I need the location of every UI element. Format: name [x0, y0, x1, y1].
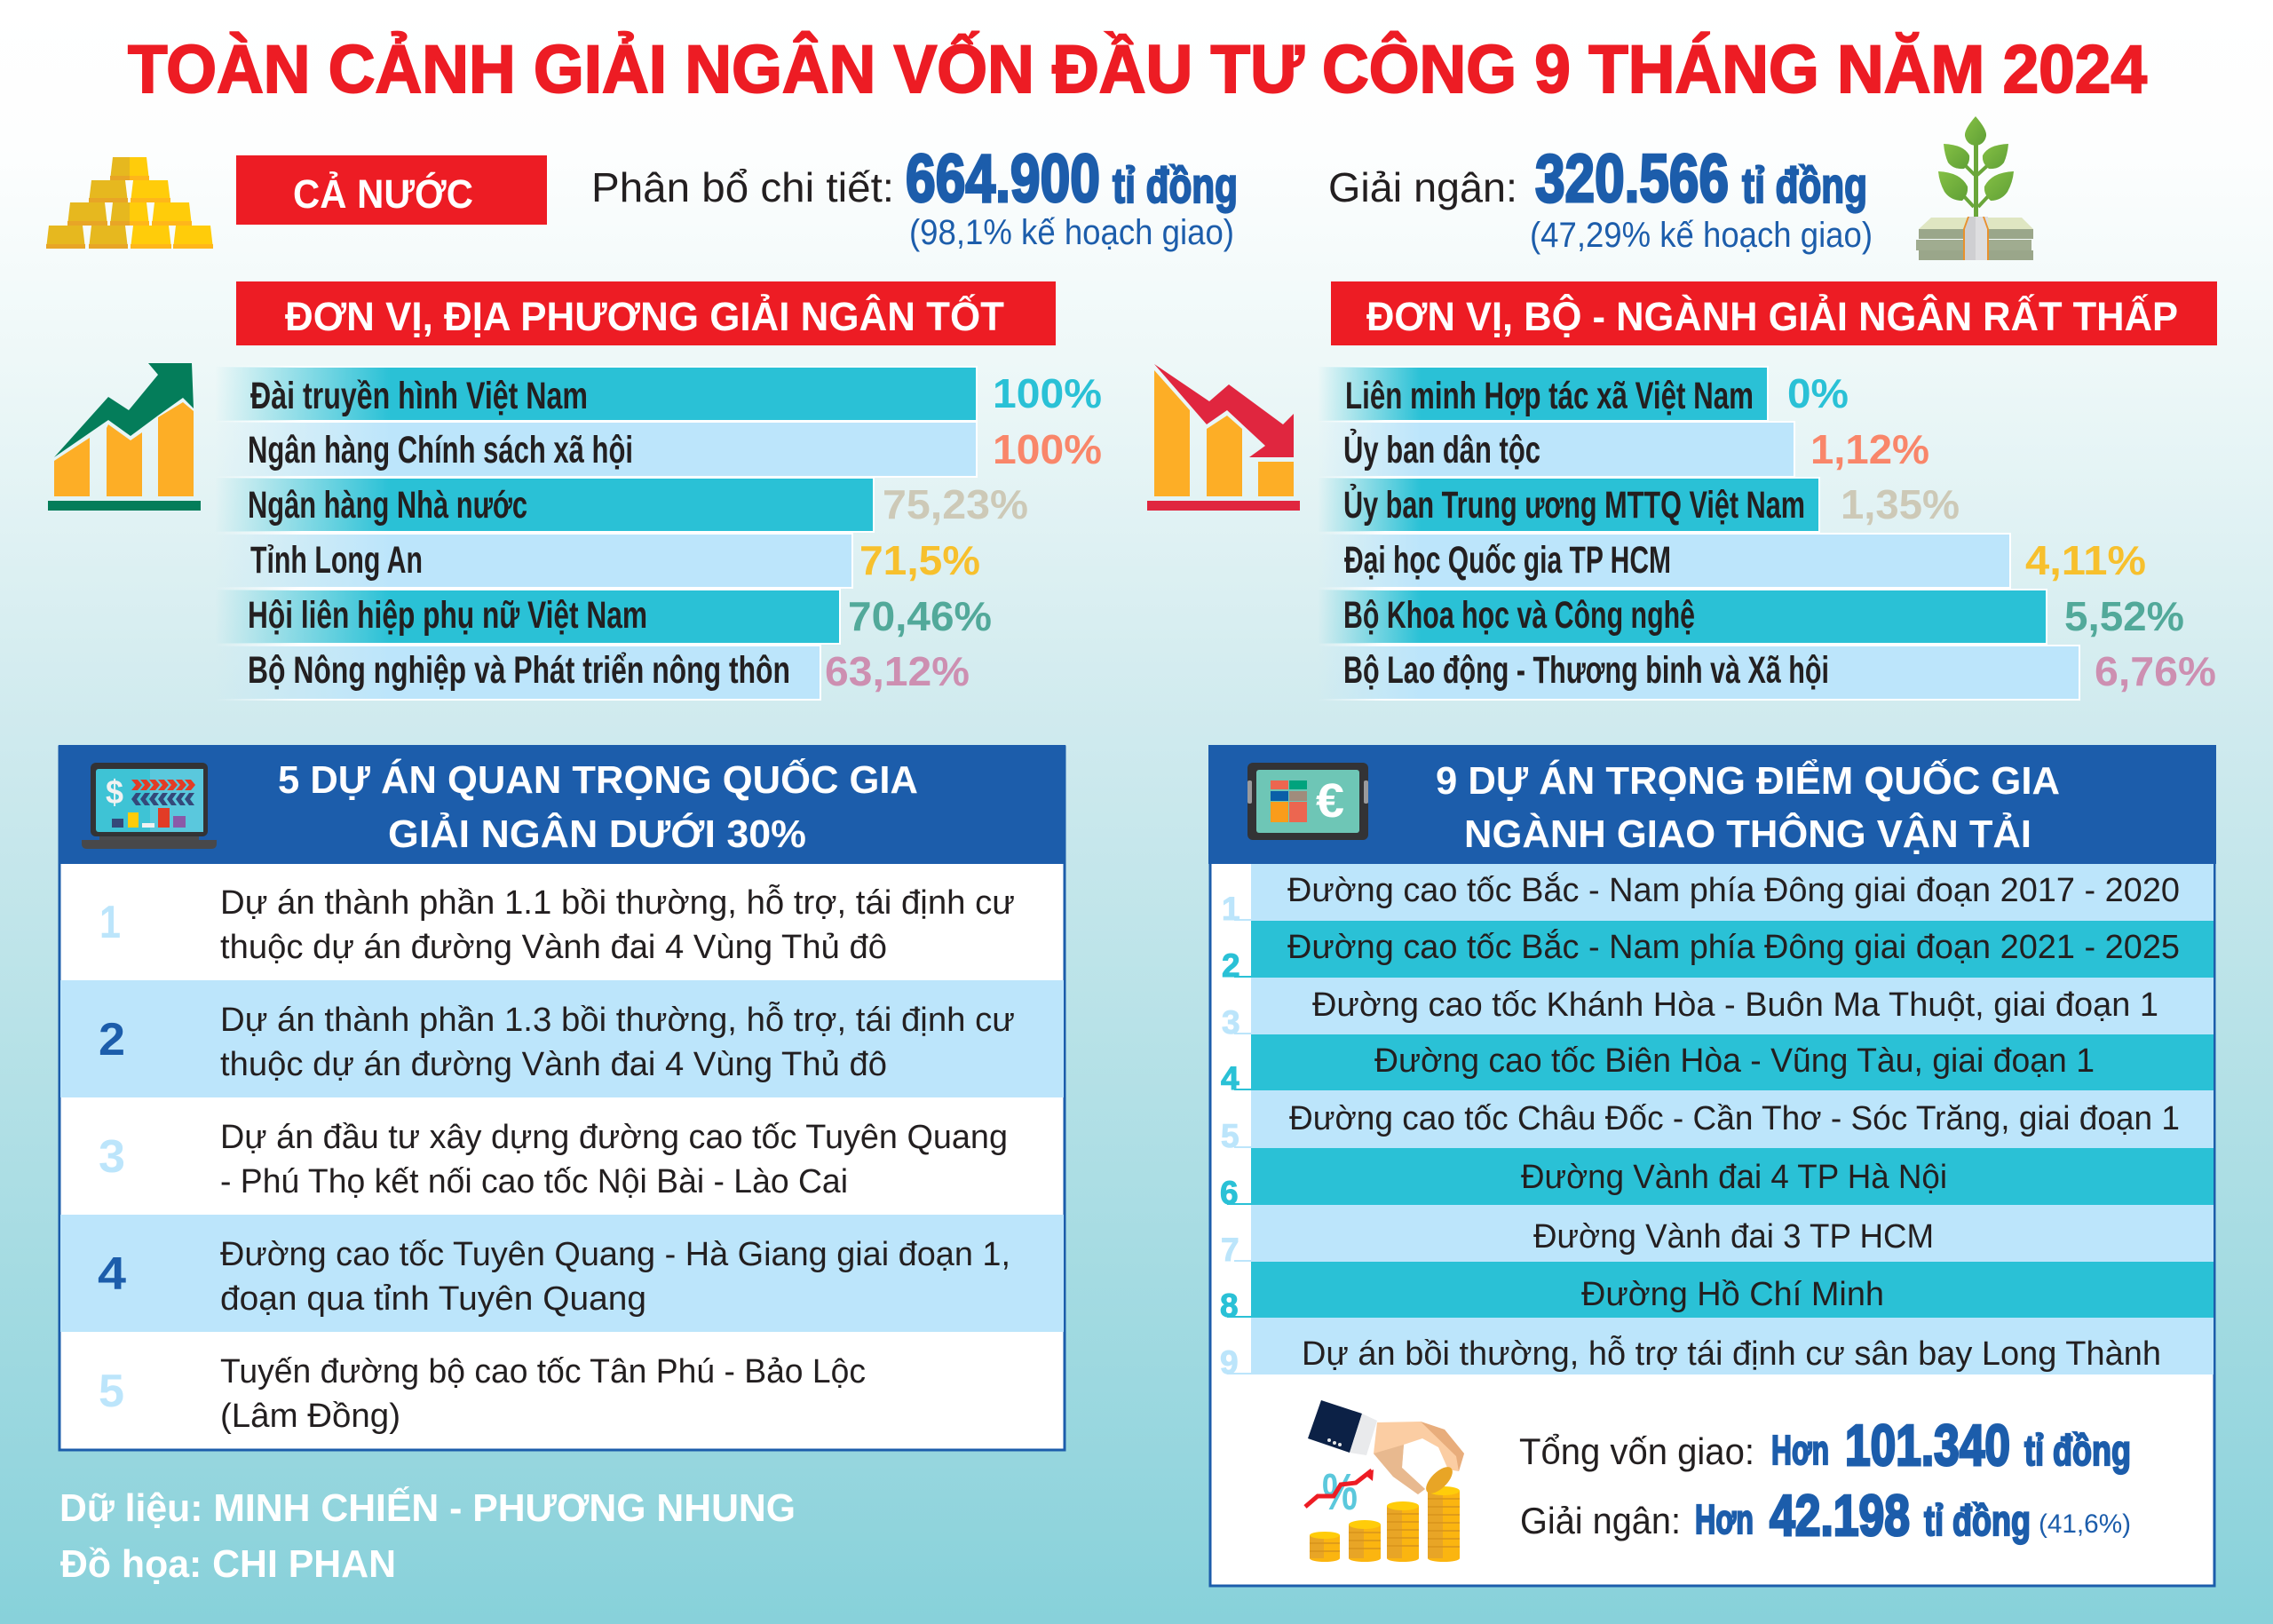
total capital: 101.340	[1845, 1413, 2010, 1477]
row: Ngân hàng Nhà nước: 75,23%	[883, 481, 1028, 527]
item 1: thuộc dự án đường Vành đai 4 Vùng Thủ đô	[220, 929, 887, 966]
row: Bộ Khoa học: Bộ Khoa học và Công nghệ	[1343, 594, 1695, 637]
row: Đại học Quốc gia: 4,11%	[2025, 537, 2146, 583]
item 2: thuộc dự án đường Vành đai 4 Vùng Thủ đô	[220, 1046, 887, 1083]
row: Đài truyền hình: 100%	[993, 370, 1102, 416]
row: Ngân hàng Nhà nước: Ngân hàng Nhà nước	[248, 484, 527, 527]
project 2	[1222, 921, 2214, 984]
credits: Đồ họa: CHI PHAN	[60, 1542, 396, 1586]
total capital: Hơn	[1771, 1427, 1829, 1473]
row: Ngân hàng Chính sách	[215, 422, 1102, 477]
label: cả nước: CẢ NƯỚC	[293, 171, 473, 217]
row: Tỉnh Long An: 71,5%	[859, 537, 980, 583]
item 1: Dự án thành phần 1.1 bồi thường, hỗ trợ, tái định cư	[220, 883, 1015, 922]
disbursed capital: tỉ đồng	[1924, 1498, 2031, 1545]
stat: giải ngân: Giải ngân:	[1328, 164, 1517, 210]
heading: 9 DỰ ÁN TRỌNG ĐIỂM QUỐC GIA	[1436, 757, 2060, 803]
project 5: Đường cao tốc Châu Đốc - Cần Thơ - Sóc Trăng, giai đoạn 1	[1289, 1100, 2180, 1137]
row: Hội liên hiệp phụ nữ: 70,46%	[848, 593, 992, 639]
row: Ngân hàng Nhà nước	[215, 478, 1028, 532]
row: Ủy ban dân tộc: Ủy ban dân tộc	[1343, 428, 1540, 471]
project 8	[1220, 1262, 2214, 1324]
project list	[1220, 864, 2214, 1381]
row: Ngân hàng Chính sách: 100%	[993, 426, 1102, 472]
project 4: Đường cao tốc Biên Hòa - Vũng Tàu, giai đoạn 1	[1374, 1042, 2095, 1080]
total capital	[1519, 1413, 2131, 1477]
item 1: 1	[99, 897, 121, 948]
row: Tỉnh Long An	[215, 534, 980, 588]
item 4: 4	[98, 1248, 126, 1300]
row: Tỉnh Long An: Tỉnh Long An	[250, 539, 423, 582]
heading	[1436, 757, 2060, 856]
row: Bộ Nông nghiệp: 63,12%	[825, 648, 970, 694]
project 1: Đường cao tốc Bắc - Nam phía Đông giai đoạn 2017 - 2020	[1287, 871, 2180, 909]
item 2: Dự án thành phần 1.3 bồi thường, hỗ trợ, tái định cư	[220, 1001, 1015, 1039]
heading: GIẢI NGÂN DƯỚI 30%	[388, 812, 806, 856]
stat: phân bổ chi tiết	[591, 141, 1238, 252]
row: Hội liên hiệp phụ nữ	[215, 590, 992, 644]
disbursed capital: (41,6%)	[2039, 1509, 2131, 1539]
row: Liên minh Hợp tác xã	[1318, 367, 1849, 421]
project 7	[1221, 1205, 2214, 1268]
heading: đơn vị giải ngân tốt: ĐƠN VỊ, ĐỊA PHƯƠNG GIẢI NGÂN TỐT	[285, 294, 1004, 339]
item 3: - Phú Thọ kết nối cao tốc Nội Bài - Lào Cai	[220, 1163, 848, 1200]
row: Bộ Khoa học	[1318, 590, 2184, 644]
row: Ủy ban Trung ương MTTQ: 1,35%	[1841, 481, 1960, 527]
row: Bộ Lao động	[1318, 646, 2216, 700]
disbursed capital: Hơn	[1695, 1496, 1754, 1542]
project 1	[1222, 864, 2214, 927]
project 6: 6	[1220, 1175, 1239, 1211]
row: Ủy ban Trung ương MTTQ: Ủy ban Trung ương MTTQ Việt Nam	[1343, 483, 1805, 527]
row: Bộ Khoa học: 5,52%	[2064, 593, 2184, 639]
project 5: 5	[1221, 1118, 1239, 1154]
bar chart: low disbursement	[1318, 367, 2216, 700]
item 5: Tuyến đường bộ cao tốc Tân Phú - Bảo Lộc	[220, 1353, 866, 1390]
item 3: 3	[99, 1131, 125, 1183]
item 2	[99, 1001, 1015, 1083]
credits	[59, 1485, 796, 1586]
project 2: Đường cao tốc Bắc - Nam phía Đông giai đoạn 2021 - 2025	[1287, 928, 2180, 966]
row: Đài truyền hình	[215, 367, 1102, 421]
disbursed capital: 42.198	[1770, 1483, 1910, 1548]
panel: 9 transport projects	[1208, 745, 2216, 1586]
project 3: 3	[1222, 1004, 1240, 1041]
item 3	[99, 1119, 1008, 1200]
project 9: 9	[1220, 1344, 1239, 1381]
icon: tablet: €	[1316, 774, 1344, 828]
heading: đơn vị giải ngân rất thấp: ĐƠN VỊ, BỘ - NGÀNH GIẢI NGÂN RẤT THẤP	[1366, 294, 2178, 339]
stat: giải ngân: 320.566	[1535, 141, 1729, 217]
stat: giải ngân: tỉ đồng	[1742, 157, 1867, 213]
bar chart: good disbursement	[215, 367, 1102, 700]
icon: laptop	[82, 763, 217, 849]
item 4: Đường cao tốc Tuyên Quang - Hà Giang giai đoạn 1,	[220, 1236, 1010, 1273]
total capital: Tổng vốn giao:	[1519, 1430, 1754, 1472]
row: Bộ Nông nghiệp: Bộ Nông nghiệp và Phát triển nông thôn	[248, 649, 790, 692]
item 2: 2	[99, 1014, 125, 1066]
icon: plant on money	[1916, 116, 2033, 260]
label: cả nước	[236, 155, 547, 225]
item 5: 5	[99, 1366, 124, 1417]
total capital: tỉ đồng	[2024, 1428, 2131, 1475]
icon: gold bars	[46, 157, 213, 249]
icon: falling chart	[1147, 364, 1300, 511]
heading: đơn vị giải ngân tốt	[236, 281, 1056, 345]
project 9: Dự án bồi thường, hỗ trợ tái định cư sân bay Long Thành	[1302, 1335, 2161, 1373]
item 5: (Lâm Đồng)	[220, 1398, 400, 1435]
stat: phân bổ chi tiết: Phân bổ chi tiết:	[591, 164, 894, 210]
row: Liên minh Hợp tác xã: Liên minh Hợp tác xã Việt Nam	[1345, 375, 1754, 417]
row: Bộ Lao động: Bộ Lao động - Thương binh và Xã hội	[1343, 649, 1829, 692]
heading: 5 DỰ ÁN QUAN TRỌNG QUỐC GIA	[278, 757, 918, 802]
project 2: 2	[1222, 947, 1240, 984]
row: Hội liên hiệp phụ nữ: Hội liên hiệp phụ nữ Việt Nam	[248, 594, 647, 637]
project 4	[1221, 1034, 2214, 1097]
row: Liên minh Hợp tác xã: 0%	[1787, 370, 1849, 416]
disbursed capital: Giải ngân:	[1520, 1500, 1681, 1541]
heading	[278, 757, 918, 856]
panel: 5 national projects	[59, 745, 1065, 1450]
project 7: 7	[1221, 1232, 1239, 1268]
icon: hand and coins: %	[1322, 1463, 1358, 1521]
project 1: 1	[1222, 891, 1240, 927]
stat: phân bổ chi tiết: tỉ đồng	[1113, 157, 1238, 213]
stat: giải ngân	[1328, 141, 1873, 255]
icon: hand and coins	[1305, 1400, 1464, 1562]
icon: tablet	[1247, 763, 1368, 840]
row: Bộ Lao động: 6,76%	[2095, 648, 2216, 694]
heading: đơn vị giải ngân rất thấp	[1331, 281, 2217, 345]
row: Ngân hàng Chính sách: Ngân hàng Chính sách xã hội	[248, 429, 633, 471]
project 3: Đường cao tốc Khánh Hòa - Buôn Ma Thuột, giai đoạn 1	[1312, 986, 2158, 1024]
row: Ủy ban dân tộc	[1318, 422, 1929, 477]
disbursed capital	[1520, 1483, 2131, 1548]
credits: Dữ liệu: MINH CHIẾN - PHƯƠNG NHUNG	[59, 1485, 796, 1530]
item 4: đoạn qua tỉnh Tuyên Quang	[220, 1280, 646, 1318]
stat: phân bổ chi tiết: (98,1% kế hoạch giao)	[909, 213, 1234, 252]
project 9	[1220, 1318, 2214, 1381]
title: TOÀN CẢNH GIẢI NGÂN VỐN ĐẦU TƯ CÔNG 9 THÁNG NĂM 2024	[128, 31, 2147, 107]
item 1	[99, 883, 1015, 966]
project 6: Đường Vành đai 4 TP Hà Nội	[1521, 1159, 1947, 1196]
heading: NGÀNH GIAO THÔNG VẬN TẢI	[1464, 811, 2031, 856]
item 4	[98, 1236, 1010, 1318]
row: Đại học Quốc gia: Đại học Quốc gia TP HCM	[1344, 539, 1671, 582]
stat: giải ngân: (47,29% kế hoạch giao)	[1530, 216, 1873, 255]
icon: rising chart	[48, 363, 201, 511]
row: Đại học Quốc gia	[1318, 534, 2146, 588]
item 3: Dự án đầu tư xây dựng đường cao tốc Tuyên Quang	[220, 1119, 1008, 1156]
icon: laptop: $	[106, 774, 123, 812]
project 6	[1220, 1148, 2214, 1211]
project 8: 8	[1220, 1287, 1239, 1324]
project 3	[1222, 978, 2214, 1041]
project 4: 4	[1221, 1060, 1239, 1097]
row: Ủy ban dân tộc: 1,12%	[1810, 426, 1929, 472]
stat: phân bổ chi tiết: 664.900	[906, 141, 1100, 217]
row: Đài truyền hình: Đài truyền hình Việt Nam	[250, 375, 588, 417]
item 5	[99, 1353, 866, 1435]
project 7: Đường Vành đai 3 TP HCM	[1533, 1218, 1934, 1256]
project 5	[1221, 1090, 2214, 1154]
project 8: Đường Hồ Chí Minh	[1581, 1276, 1884, 1313]
